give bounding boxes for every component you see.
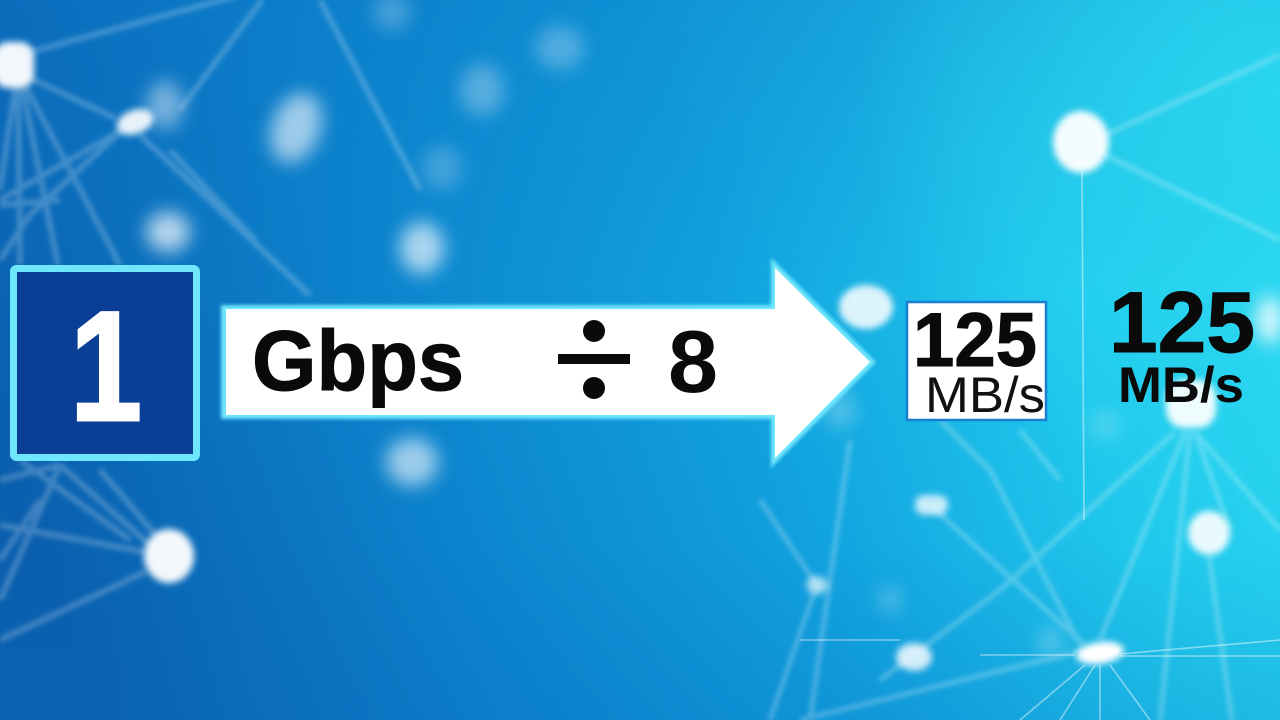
unit label: Gbps: Gbps <box>252 314 464 409</box>
divisor: 8: 8 <box>668 312 718 411</box>
number box: 1 <box>14 268 196 458</box>
digit 1: 1 <box>70 280 142 454</box>
result text: 125 MB/s <box>1109 275 1255 413</box>
network lines right <box>760 55 1280 720</box>
result box: 125 MB/s: MB/s <box>925 367 1045 423</box>
result text: 125 MB/s: MB/s <box>1118 357 1244 413</box>
result text: 125 MB/s: 125 <box>1109 275 1255 371</box>
arrow: Gbps divided by 8 <box>221 258 876 468</box>
result box: 125 MB/s: 125 <box>913 298 1037 383</box>
network lines left <box>0 0 420 640</box>
result box: 125 MB/s <box>907 298 1046 423</box>
operator: divide sign <box>558 320 630 399</box>
